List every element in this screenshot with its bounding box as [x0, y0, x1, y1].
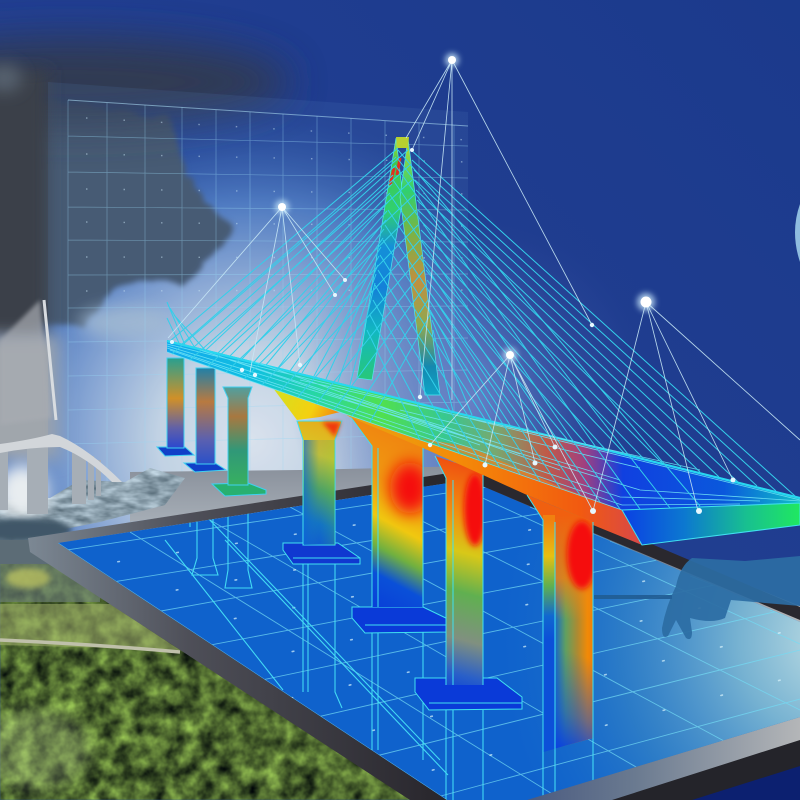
- crescent at right edge: [795, 204, 800, 262]
- simulated pier 5: [350, 415, 450, 633]
- pier 7 left strip: [543, 515, 555, 755]
- tablet device: [28, 474, 800, 800]
- pylon right leg: [400, 138, 440, 395]
- pier 7 upper heat: [528, 495, 592, 618]
- tablet underside: [610, 738, 800, 800]
- storm haze and cloud: [0, 38, 290, 460]
- storm bridge tower leg: [44, 300, 56, 420]
- bridge pylon: [357, 137, 440, 395]
- pylon top: [396, 137, 409, 148]
- dark haze at top: [0, 38, 290, 126]
- wave spray: [0, 464, 48, 520]
- tree canopy: [0, 564, 410, 800]
- dark left column: [0, 70, 48, 340]
- right far cables: [411, 150, 795, 496]
- deck end face: [622, 503, 800, 545]
- sensor network lines: [168, 60, 800, 511]
- sunlit trees: [0, 710, 90, 790]
- pylon hot streaks: [390, 158, 400, 185]
- simulated pier 1: [157, 358, 194, 456]
- hologram panel with grid: [48, 82, 468, 520]
- pier 7 cool base: [544, 656, 593, 752]
- storm bridge piers: [0, 442, 101, 514]
- bridge deck: [167, 340, 800, 545]
- grass clearing: [0, 604, 180, 650]
- deck underside wedge: [273, 388, 340, 420]
- screen light falloff: [58, 480, 800, 800]
- light glow behind bridge: [0, 90, 600, 570]
- simulated pier 7: [525, 495, 597, 755]
- small sensor points: [170, 148, 736, 514]
- dark corner below tablet: [690, 765, 800, 800]
- pier 7 hot spot: [567, 521, 597, 589]
- deck far rim: [167, 341, 800, 498]
- sensor nodes: [170, 53, 736, 514]
- forest landscape: [0, 540, 440, 800]
- sea and waves: [0, 468, 185, 540]
- right near cables: [367, 150, 700, 509]
- hand silhouette with stylus: [594, 556, 800, 639]
- screen data dots: [117, 524, 781, 771]
- storm cloud: [0, 92, 232, 325]
- secondary glow under pylon: [290, 220, 650, 580]
- left near cables: [172, 150, 430, 422]
- tablet screen: [58, 480, 800, 800]
- pier 4 red cap: [322, 422, 341, 437]
- misty town: [0, 540, 48, 564]
- bright spot in cloud: [0, 64, 22, 92]
- tablet bezel: [460, 472, 800, 800]
- storm bridge deck: [0, 434, 122, 482]
- wireframe reflections: [165, 510, 593, 800]
- deck top: [167, 340, 800, 510]
- storm bridge: towers and deck: [0, 300, 122, 514]
- screen grid: [58, 487, 800, 800]
- orange near side of deck: [420, 438, 622, 510]
- end hatch cables: [167, 302, 205, 350]
- tablet left side: [28, 469, 800, 800]
- pylon left leg: [357, 138, 403, 380]
- dark wave: [0, 518, 72, 542]
- simulated pier 6: [415, 455, 522, 710]
- simulated pier 2: [184, 368, 226, 472]
- deck lane lines: [167, 344, 800, 510]
- deck underside strip: [340, 411, 642, 545]
- distant sea band: [130, 466, 470, 522]
- large sensor glows: [275, 53, 655, 362]
- lighter left haze: [0, 335, 60, 460]
- pale mist under cloud: [79, 306, 171, 338]
- pier 4 shading: [304, 440, 335, 545]
- left far cables: [170, 148, 398, 385]
- road: [0, 640, 180, 652]
- stay cables: [167, 148, 795, 509]
- storm bridge cables: [0, 300, 52, 425]
- simulated pier 4: [283, 421, 360, 564]
- simulated pier 3: [212, 387, 266, 496]
- pier 7 lower body: [525, 495, 595, 755]
